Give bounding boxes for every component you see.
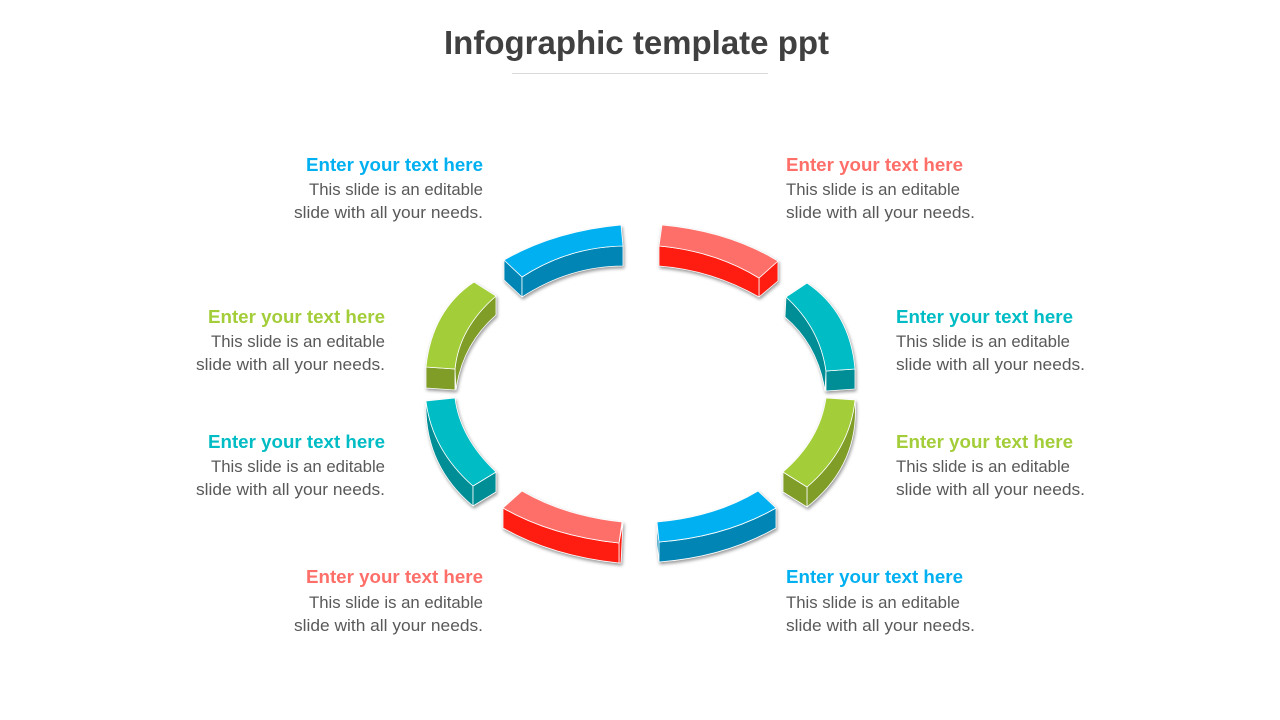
text block: lower left: Enter your text here bbox=[208, 432, 385, 452]
text block: upper left: slide with all your needs. bbox=[196, 355, 385, 374]
text block: bottom left: Enter your text here bbox=[306, 567, 483, 587]
title: Infographic template ppt bbox=[444, 24, 829, 61]
text block: top right bbox=[786, 155, 975, 222]
text block: bottom right bbox=[786, 567, 975, 635]
text block: bottom left: This slide is an editable bbox=[309, 593, 483, 612]
text block: top right: Enter your text here bbox=[786, 155, 963, 175]
text block: lower right bbox=[896, 432, 1085, 499]
text block: lower left: slide with all your needs. bbox=[196, 480, 385, 499]
text block: lower left: This slide is an editable bbox=[211, 457, 385, 476]
ring segment: blue top bbox=[504, 225, 623, 297]
text block: upper right: This slide is an editable bbox=[896, 332, 1070, 351]
text block: lower right: slide with all your needs. bbox=[896, 480, 1085, 499]
text block: top right: This slide is an editable bbox=[786, 180, 960, 199]
text block: upper left: This slide is an editable bbox=[211, 332, 385, 351]
text block: lower right: Enter your text here bbox=[896, 432, 1073, 452]
text block: upper left: Enter your text here bbox=[208, 307, 385, 327]
text block: upper left bbox=[196, 307, 385, 374]
text block: top right: slide with all your needs. bbox=[786, 203, 975, 222]
text block: bottom left bbox=[294, 567, 483, 635]
text block: top left: slide with all your needs. bbox=[294, 203, 483, 222]
text block: top left: Enter your text here bbox=[306, 155, 483, 175]
ring segment: green lower right bbox=[783, 398, 855, 507]
text block: upper right: Enter your text here bbox=[896, 307, 1073, 327]
text block: lower left bbox=[196, 432, 385, 499]
ring segment: teal upper right bbox=[785, 283, 855, 391]
text block: bottom right: slide with all your needs. bbox=[786, 616, 975, 635]
text block: top left: This slide is an editable bbox=[309, 180, 483, 199]
text block: bottom right: This slide is an editable bbox=[786, 593, 960, 612]
text block: bottom left: slide with all your needs. bbox=[294, 616, 483, 635]
text block: top left bbox=[294, 155, 483, 222]
text block: upper right: slide with all your needs. bbox=[896, 355, 1085, 374]
ring segment: red top bbox=[659, 225, 778, 297]
text block: upper right bbox=[896, 307, 1085, 374]
ring segment: blue bottom bbox=[657, 491, 776, 562]
text block: bottom right: Enter your text here bbox=[786, 567, 963, 587]
text block: lower right: This slide is an editable bbox=[896, 457, 1070, 476]
ring segment: teal lower left bbox=[426, 398, 496, 506]
ring segment: green upper left bbox=[426, 282, 496, 390]
ring segment: red bottom bbox=[503, 491, 623, 563]
